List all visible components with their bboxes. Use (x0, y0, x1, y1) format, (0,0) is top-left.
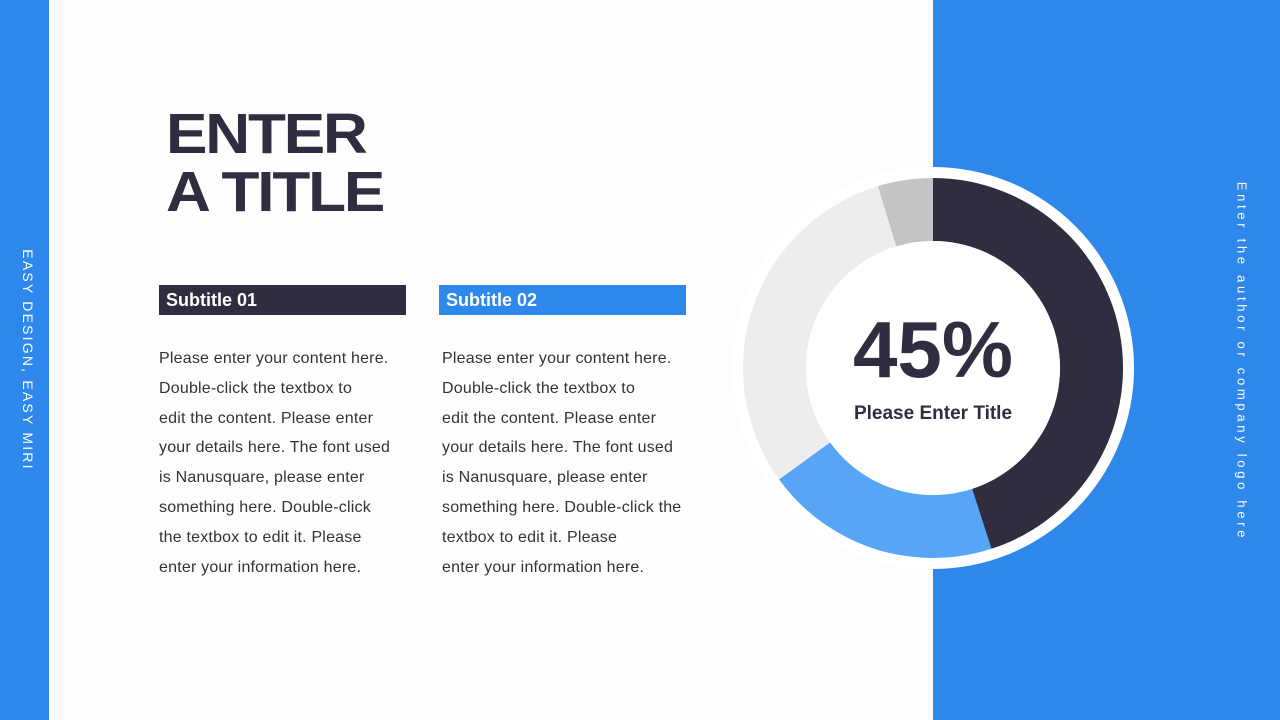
title (166, 102, 383, 224)
body text 01: your details here. The font used (159, 439, 390, 456)
body text 02: Double-click the textbox to (442, 380, 635, 397)
title: A TITLE (166, 160, 383, 224)
donut chart: 45% (853, 305, 1013, 394)
body text 01: edit the content. Please enter (159, 410, 373, 427)
right blue panel (933, 0, 1280, 720)
body text 01: Please enter your content here. (159, 350, 388, 367)
body text 01: the textbox to edit it. Please (159, 529, 362, 546)
title: ENTER (166, 102, 366, 166)
body text 02: is Nanusquare, please enter (442, 469, 648, 486)
body text 01 (159, 350, 390, 576)
body text 02: Please enter your content here. (442, 350, 671, 367)
donut chart: Please Enter Title (854, 403, 1012, 424)
subtitle 01: Subtitle 01 (166, 290, 257, 310)
body text 02: something here. Double-click the (442, 499, 681, 516)
subtitle 02: Subtitle 02 (446, 290, 537, 310)
left blue bar (0, 0, 49, 720)
body text 02: your details here. The font used (442, 439, 673, 456)
subtitle 02 (439, 285, 686, 315)
body text 02: textbox to edit it. Please (442, 529, 617, 546)
body text 01: Double-click the textbox to (159, 380, 352, 397)
body text 01: enter your information here. (159, 559, 361, 576)
subtitle 01 (159, 285, 406, 315)
right vertical text: Enter the author or company logo here (1234, 182, 1250, 541)
body text 01: something here. Double-click (159, 499, 371, 516)
body text 01: is Nanusquare, please enter (159, 469, 365, 486)
body text 02: edit the content. Please enter (442, 410, 656, 427)
left vertical text: EASY DESIGN, EASY MIRI (20, 249, 36, 471)
body text 02 (442, 350, 681, 576)
body text 02: enter your information here. (442, 559, 644, 576)
